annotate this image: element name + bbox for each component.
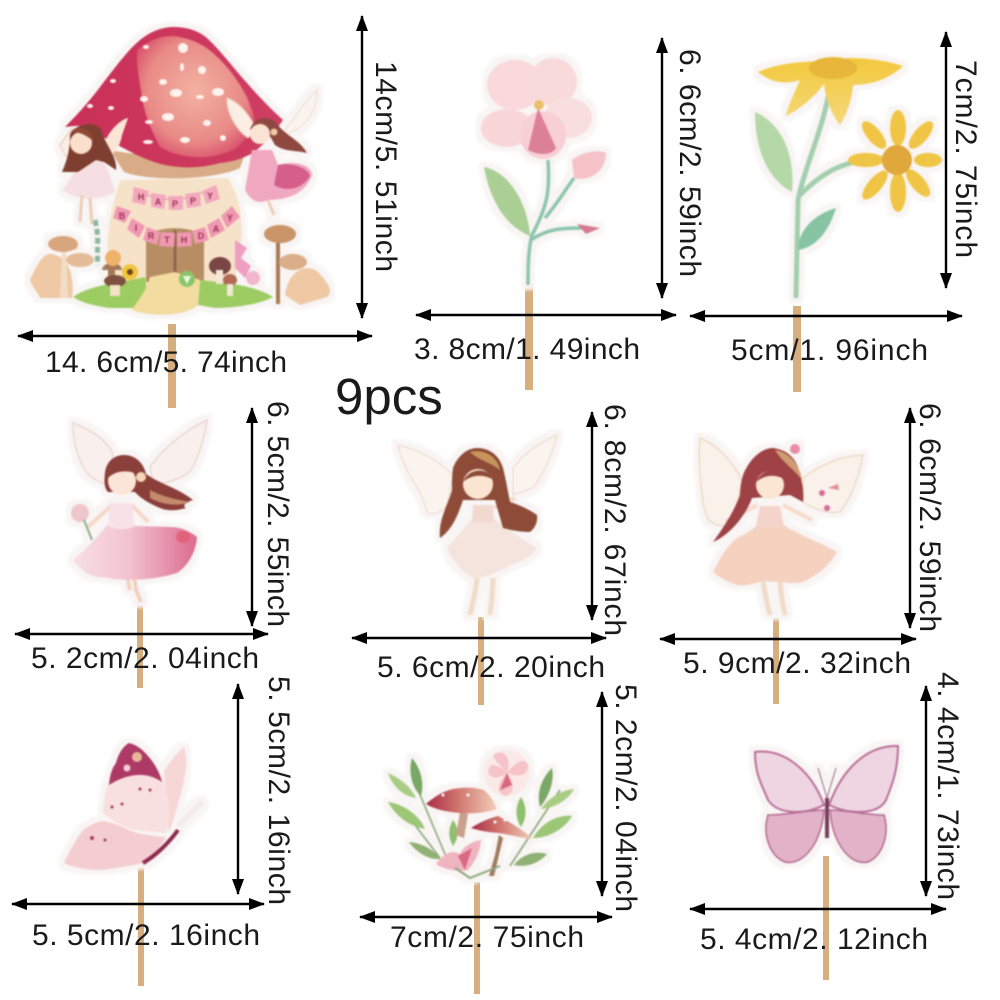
bunting: B — [119, 211, 126, 221]
illustration: front butterfly — [755, 746, 898, 862]
stick: fairy three — [773, 618, 779, 704]
bunting: T — [164, 235, 170, 245]
bunting: P — [190, 196, 196, 206]
dimension: fairy one height: 6. 5cm/2. 55inch — [261, 401, 294, 627]
stick: yellow flower — [793, 306, 801, 392]
stick: pink flower — [525, 284, 533, 390]
door — [146, 228, 204, 282]
illustration: fairy one — [71, 420, 207, 602]
illustration: fairy three — [699, 438, 863, 615]
bunting: H — [138, 192, 144, 202]
bunting: H — [181, 235, 187, 245]
stick: front butterfly — [823, 856, 829, 980]
illustration: side butterfly — [64, 743, 202, 870]
dimension: side butterfly width: 5. 5cm/2. 16inch — [32, 919, 260, 952]
foliage left and right — [30, 254, 330, 305]
dimension: front butterfly width: 5. 4cm/2. 12inch — [700, 923, 928, 956]
dimension: mushroom height: 14cm/5. 51inch — [369, 61, 402, 272]
bunting: A — [155, 197, 162, 207]
dimension: mushroom width: 14. 6cm/5. 74inch — [45, 346, 287, 379]
dimension: fairy three width: 5. 9cm/2. 32inch — [683, 647, 911, 680]
quantity label: 9pcs — [335, 368, 443, 425]
bunting: I — [135, 223, 137, 233]
bunting: Y — [227, 213, 233, 223]
stick: fairy one — [137, 600, 143, 688]
cap — [65, 27, 283, 167]
illustration: yellow flowers — [755, 57, 942, 298]
dimension: mushroom bouquet height: 5. 2cm/2. 04inch — [609, 684, 642, 912]
small mushrooms and flowers — [102, 263, 122, 284]
illustration: fairy two — [398, 435, 557, 615]
gills — [110, 145, 248, 178]
dimension: fairy two height: 6. 8cm/2. 67inch — [598, 404, 631, 636]
cap spots — [87, 43, 226, 144]
right fairy — [227, 90, 317, 215]
dimension: side butterfly height: 5. 5cm/2. 16inch — [262, 676, 295, 905]
dimension: front butterfly height: 4. 4cm/1. 73inch — [931, 672, 964, 900]
illustration: pink flower — [481, 58, 606, 285]
stick: mushroom bouquet — [474, 882, 480, 994]
house — [108, 178, 242, 285]
stick: mushroom house — [168, 324, 176, 408]
dimension: yellow flower width: 5cm/1. 96inch — [731, 334, 928, 367]
dimension: fairy three height: 6. 6cm/2. 59inch — [913, 403, 946, 632]
bunting: R — [148, 231, 155, 241]
stick: side butterfly — [138, 866, 144, 986]
bunting: Y — [207, 191, 213, 201]
dimension: pink flower height: 6. 6cm/2. 59inch — [673, 49, 706, 277]
dimension: fairy two width: 5. 6cm/2. 20inch — [377, 651, 605, 684]
dimension: pink flower width: 3. 8cm/1. 49inch — [414, 333, 640, 366]
illustration: mushroom bouquet — [388, 750, 574, 878]
bunting: P — [172, 199, 178, 209]
dimension: yellow flower height: 7cm/2. 75inch — [949, 60, 982, 258]
left fairy — [60, 118, 128, 224]
bunting: A — [213, 224, 220, 234]
bunting: D — [198, 231, 205, 241]
dimension: mushroom bouquet width: 7cm/2. 75inch — [390, 921, 584, 954]
sprig — [95, 220, 98, 265]
bunting — [113, 185, 240, 247]
ground — [73, 277, 273, 308]
stick: fairy two — [478, 617, 484, 705]
illustration: mushroom house with fairies — [30, 27, 330, 315]
dimension: fairy one width: 5. 2cm/2. 04inch — [31, 642, 259, 675]
